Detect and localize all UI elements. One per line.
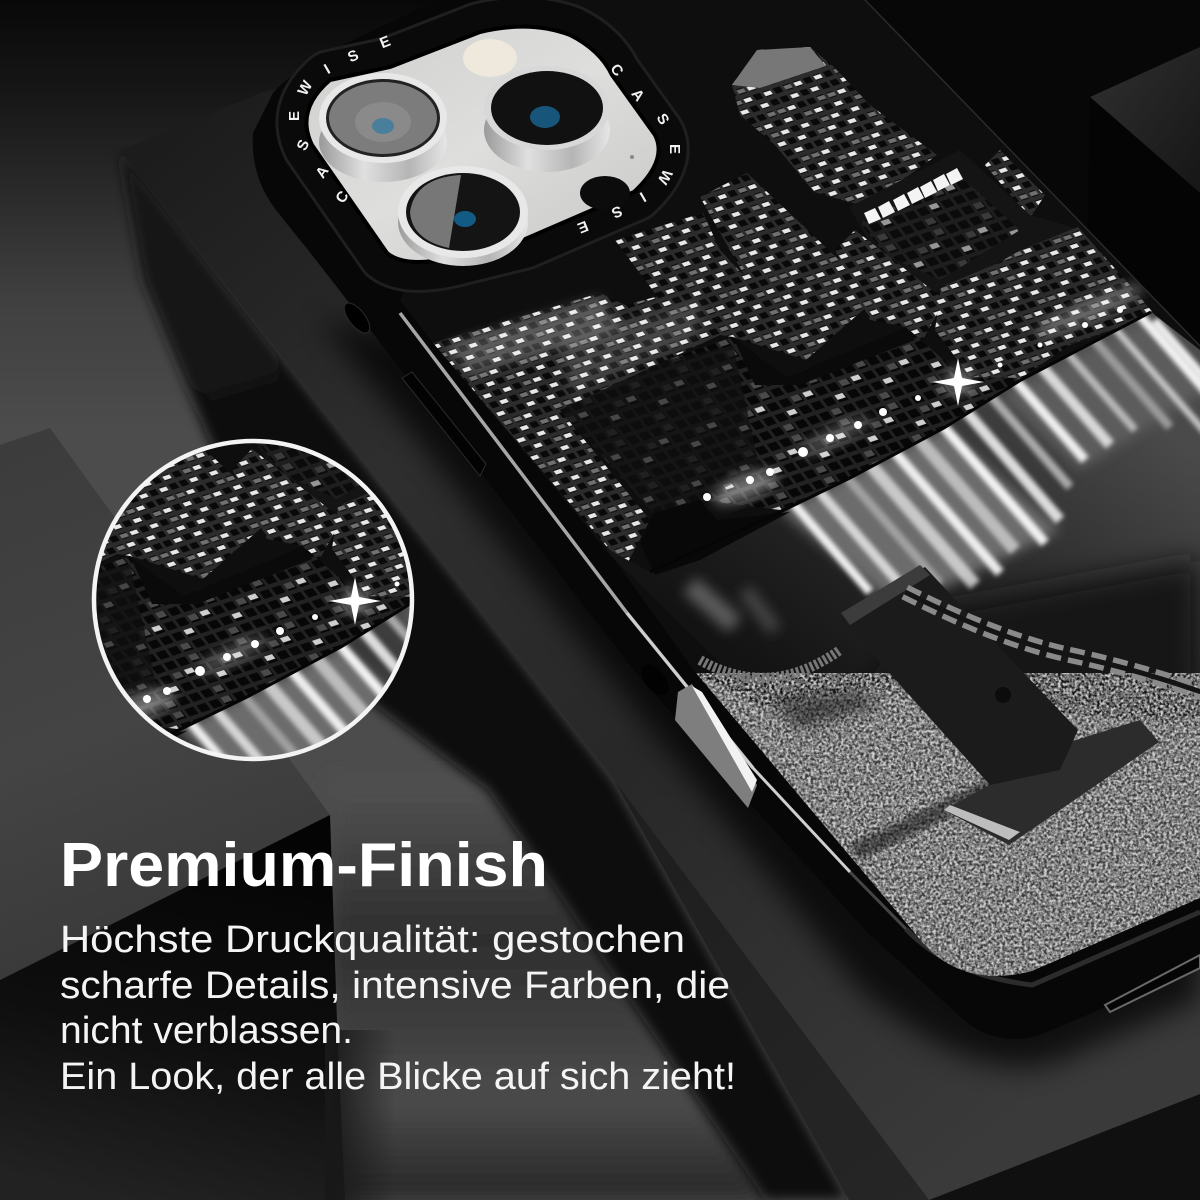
flash — [463, 39, 517, 77]
charging port — [1105, 955, 1200, 1012]
brand lettering on ring: E — [286, 111, 303, 121]
brand lettering on ring — [286, 33, 683, 236]
brand lettering on ring: W — [653, 166, 675, 188]
brand lettering on ring: S — [345, 47, 361, 66]
phone shadow — [320, 320, 1200, 1067]
brand lettering on ring: C — [332, 188, 353, 207]
brand lettering on ring: E — [575, 217, 591, 236]
body text — [60, 919, 736, 1098]
body text: Ein Look, der alle Blicke auf sich zieht! — [60, 1056, 736, 1098]
mooring chains — [700, 592, 1200, 695]
camera bump — [286, 27, 683, 266]
phone case body — [253, 0, 1200, 1039]
lens bottom — [398, 166, 528, 266]
lens top right — [484, 66, 610, 172]
lens top left — [319, 73, 447, 182]
brand lettering on ring: S — [653, 111, 672, 128]
mooring bollard — [841, 565, 1159, 845]
body text: Höchste Druckqualität: gestochen — [60, 919, 685, 961]
brand lettering on ring: A — [628, 86, 648, 105]
brand lettering on ring: S — [609, 202, 625, 221]
brand lettering on ring: I — [321, 61, 333, 78]
foreground ground texture — [696, 673, 1200, 976]
lidar and microphone — [580, 176, 630, 210]
brand lettering on ring: W — [295, 77, 317, 99]
body text: scharfe Details, intensive Farben, die — [60, 965, 730, 1007]
brand lettering on ring: E — [666, 144, 683, 154]
heading: Premium-Finish — [60, 831, 548, 900]
brand lettering on ring: E — [377, 33, 393, 52]
bezel edge highlight — [400, 313, 906, 929]
case photo: night skyline — [400, 0, 1200, 976]
side buttons — [340, 299, 757, 808]
brand lettering on ring: A — [312, 163, 333, 182]
glossy bezel highlight — [864, 0, 1200, 347]
detail magnifier circle — [92, 438, 414, 762]
brand lettering on ring: S — [294, 137, 313, 153]
body text: nicht verblassen. — [60, 1010, 353, 1052]
brand lettering on ring: C — [607, 61, 627, 80]
brand lettering on ring: I — [637, 188, 649, 205]
